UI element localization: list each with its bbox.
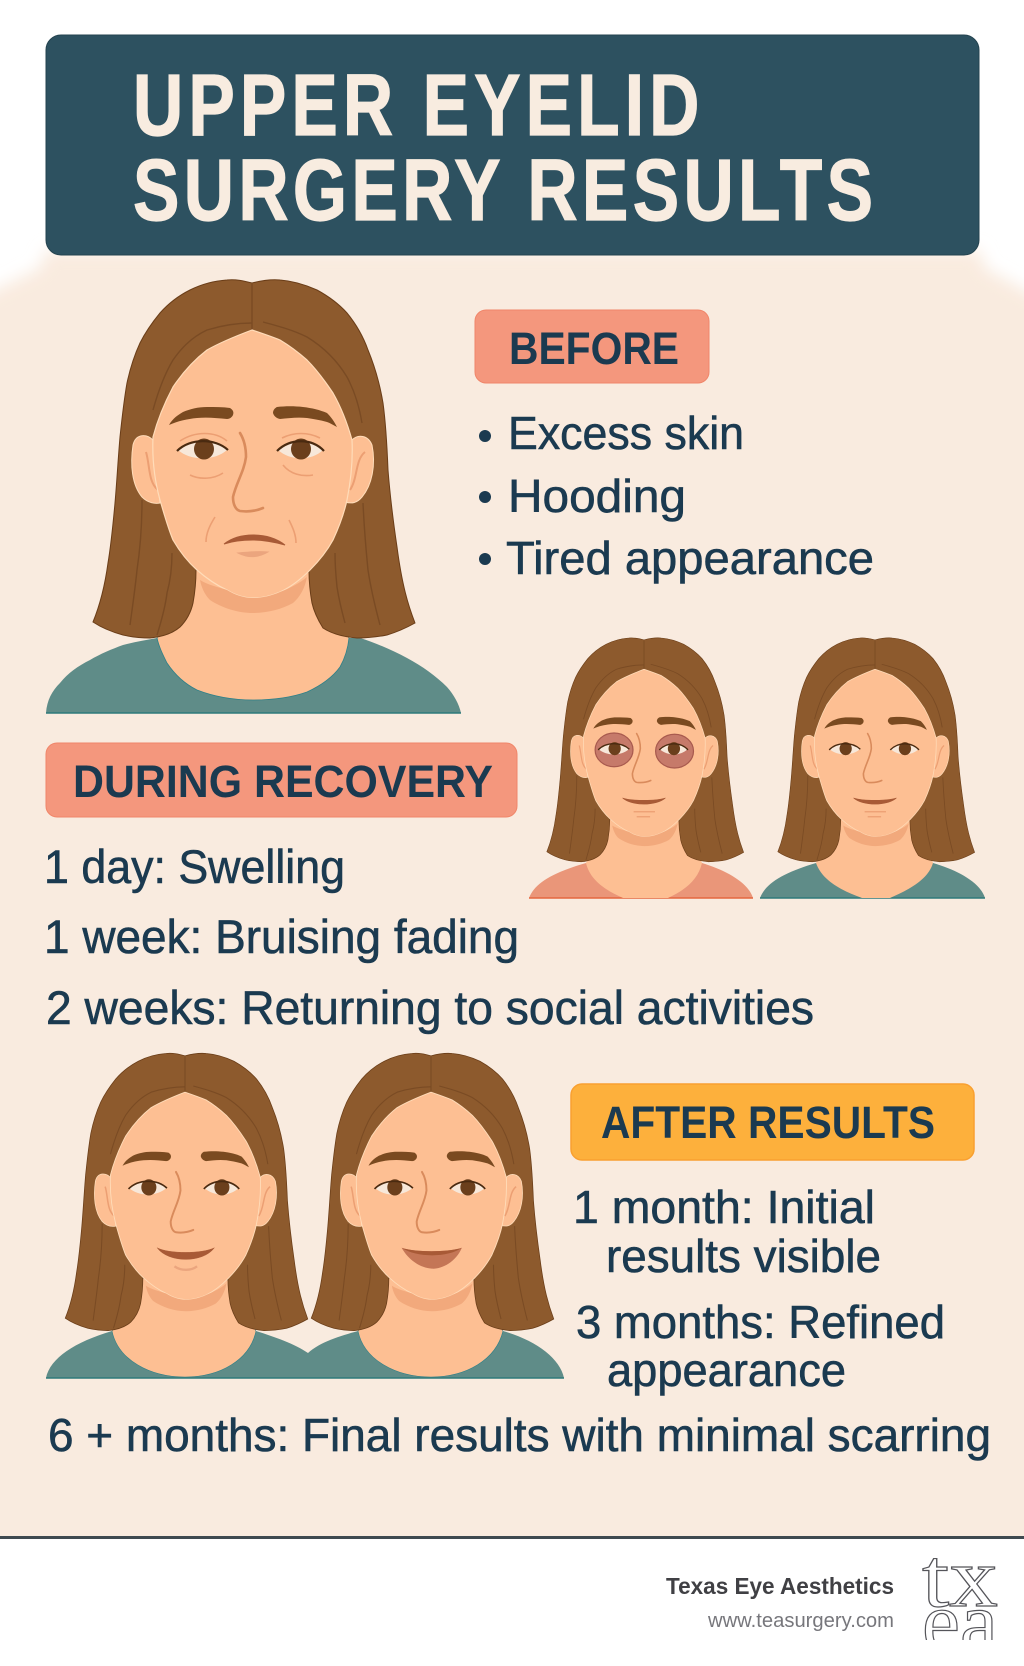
after results timeline: appearance: [607, 1344, 846, 1396]
illustration: recovery face healing: [760, 638, 985, 898]
before symptom list: Excess skin: [508, 407, 744, 459]
illustration: before face: [46, 280, 461, 713]
during recovery label: DURING RECOVERY: [73, 756, 493, 807]
before symptom list: Tired appearance: [506, 532, 874, 584]
before label: [475, 310, 709, 383]
before symptom list: Hooding: [508, 470, 686, 522]
title: SURGERY RESULTS: [133, 142, 873, 239]
recovery timeline: [44, 840, 814, 1034]
before label: BEFORE: [509, 323, 679, 374]
recovery timeline: 1 week: Bruising fading: [44, 910, 519, 963]
after results label: AFTER RESULTS: [601, 1097, 935, 1148]
footer brand text: www.teasurgery.com: [707, 1610, 894, 1632]
footer logo: [922, 1558, 998, 1640]
recovery timeline: 1 day: Swelling: [44, 840, 345, 893]
footer rule: [0, 1536, 1024, 1539]
during recovery label: [46, 743, 517, 817]
illustration: after face smiling: [311, 1053, 554, 1377]
title banner: [46, 35, 979, 255]
after results label: [571, 1084, 974, 1160]
after results timeline: results visible: [606, 1230, 881, 1282]
title: [133, 57, 873, 239]
after results timeline: 3 months: Refined: [576, 1296, 945, 1348]
illustration: recovery face with bruising: [529, 638, 753, 898]
after results timeline: [48, 1181, 991, 1461]
footer brand text: Texas Eye Aesthetics: [666, 1573, 894, 1599]
footer logo: tx: [922, 1531, 998, 1625]
recovery timeline: 2 weeks: Returning to social activities: [46, 981, 814, 1034]
title: UPPER EYELID: [133, 57, 699, 154]
illustration: shoulders of after faces: [46, 1331, 564, 1378]
footer brand text: [666, 1573, 894, 1632]
after results timeline: 6 + months: Final results with minimal scarring: [48, 1409, 991, 1461]
illustration: after face one month: [65, 1053, 308, 1377]
after results timeline: 1 month: Initial: [573, 1181, 875, 1233]
before symptom list: [479, 407, 874, 584]
